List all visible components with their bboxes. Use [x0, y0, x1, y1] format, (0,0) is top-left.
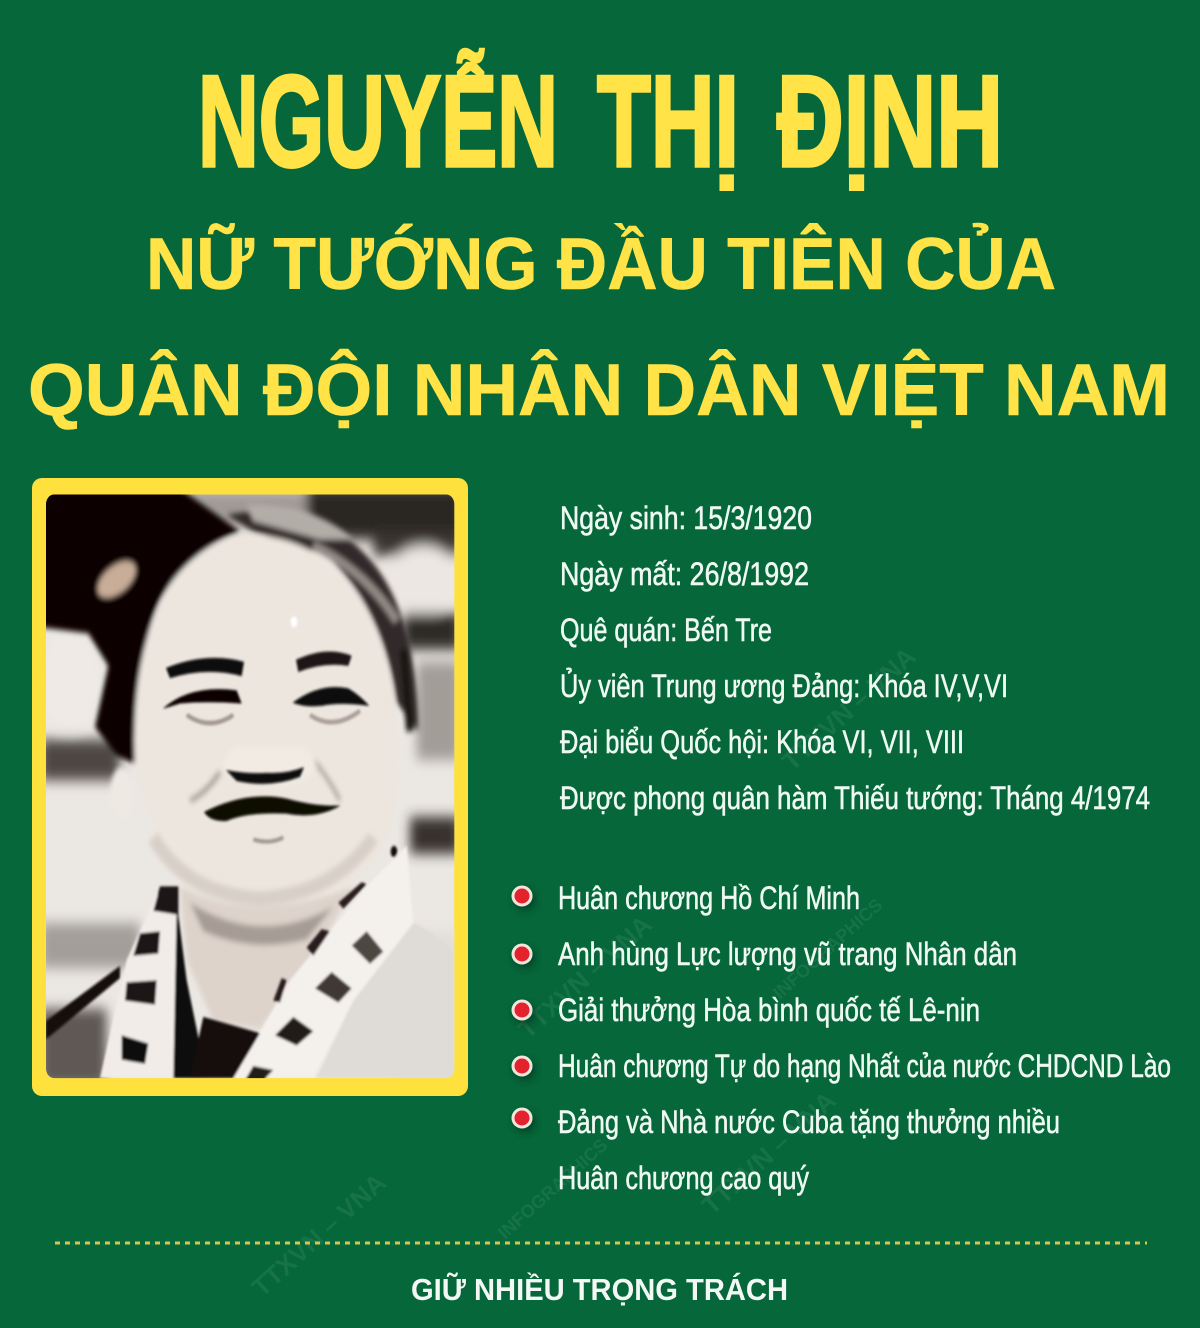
biography facts [560, 500, 1150, 816]
face [129, 530, 400, 767]
watermarks: TTXVN – VNA [696, 1085, 842, 1220]
award lines: Giải thưởng Hòa bình quốc tế Lê-nin [558, 992, 980, 1028]
title line: name: NGUYỄN [198, 48, 558, 194]
award lines: Huân chương Hồ Chí Minh [558, 880, 860, 916]
biography facts: Đại biểu Quốc hội: Khóa VI, VII, VIII [560, 724, 964, 760]
backdrop tones [184, 494, 314, 534]
nose [226, 767, 304, 784]
portrait photo [40, 486, 463, 1086]
section heading: GIỮ NHIỀU TRỌNG TRÁCH [411, 1271, 788, 1307]
watermarks [246, 641, 922, 1302]
eyebrows [166, 658, 244, 678]
bullet icons [513, 887, 531, 1127]
watermarks: INFOGRAPHICS [769, 895, 886, 1003]
watermarks: TTXVN – VNA [512, 909, 658, 1044]
forehead highlight [291, 617, 297, 627]
title line: subtitle 1: NỮ TƯỚNG ĐẦU TIÊN CỦA [146, 224, 1056, 305]
award lines: Đảng và Nhà nước Cuba tặng thưởng nhiều [558, 1104, 1060, 1140]
mouth [204, 796, 341, 821]
scarf [100, 894, 177, 1078]
portrait frame [32, 478, 468, 1096]
biography facts: Ủy viên Trung ương Đảng: Khóa IV,V,VI [560, 668, 1008, 704]
title line: name [198, 48, 1003, 194]
title line: subtitle 2: QUÂN ĐỘI NHÂN DÂN VIỆT NAM [28, 350, 1170, 431]
earring [109, 760, 130, 792]
shirt [317, 923, 454, 1078]
biography facts: Ngày sinh: 15/3/1920 [560, 500, 812, 536]
title line: name: ĐỊNH [777, 48, 1003, 194]
watermarks: INFOGRAPHICS [494, 1135, 611, 1243]
watermarks: TTXVN – VNA [776, 641, 922, 776]
award lines [558, 880, 1171, 1196]
title line: name: THỊ [597, 48, 739, 194]
hair [40, 486, 240, 764]
cheek shading [190, 772, 220, 801]
awards list [513, 880, 1171, 1196]
eyes [163, 689, 242, 709]
neck [180, 886, 353, 1029]
award lines: Anh hùng Lực lượng vũ trang Nhân dân [558, 936, 1017, 972]
biography facts: Ngày mất: 26/8/1992 [560, 556, 809, 592]
watermarks: TTXVN – VNA [246, 1167, 392, 1302]
biography facts: Quê quán: Bến Tre [560, 612, 772, 648]
award lines: Huân chương cao quý [558, 1160, 809, 1196]
title [28, 48, 1170, 431]
nose highlight [310, 758, 318, 768]
